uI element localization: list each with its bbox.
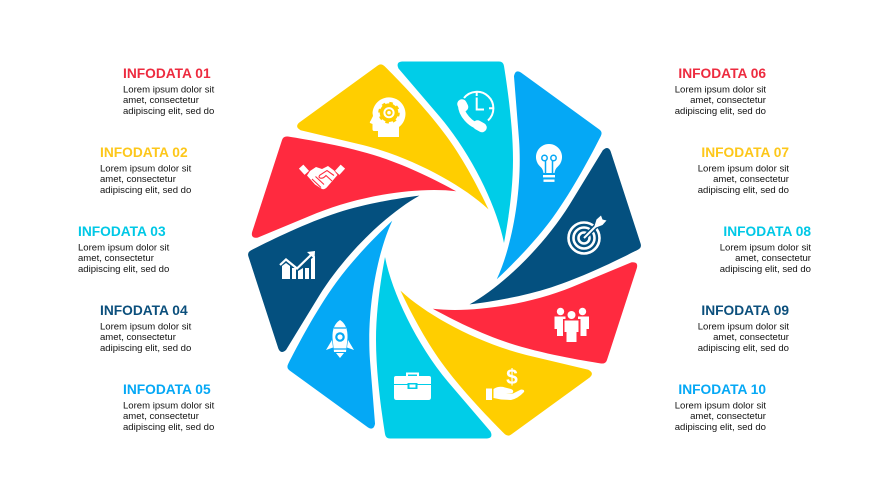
text: infodata 04: INFODATA 04 — [100, 303, 188, 318]
blade: red team — [430, 208, 638, 373]
text: infodata 07: Lorem ipsum dolor sit — [698, 164, 789, 174]
text: infodata 06: INFODATA 06 — [678, 66, 766, 81]
text: infodata 03 — [78, 224, 170, 275]
icon: head with gear — [370, 97, 405, 137]
icon: hand holding dollar — [486, 366, 524, 400]
wheel of ten blades — [244, 57, 645, 443]
text: infodata 07: adipiscing elit, sed do — [698, 185, 789, 196]
text: infodata 09: amet, consectetur — [713, 332, 790, 343]
text: infodata 05: adipiscing elit, sed do — [123, 422, 214, 433]
text: infodata 03: amet, consectetur — [78, 253, 155, 264]
text: infodata 05: Lorem ipsum dolor sit — [123, 400, 215, 412]
text: infodata 09: adipiscing elit, sed do — [698, 343, 789, 354]
text: infodata 01: Lorem ipsum dolor sit — [123, 84, 215, 96]
blade: navy chart — [244, 187, 452, 353]
text: infodata 05: INFODATA 05 — [123, 382, 211, 397]
text: infodata 01: INFODATA 01 — [123, 66, 211, 81]
text: infodata 08: INFODATA 08 — [723, 224, 811, 239]
text: infodata 05: amet, consectetur — [123, 411, 200, 422]
text: infodata 06: amet, consectetur — [690, 95, 767, 106]
icon: hand holding dollar: $ — [506, 366, 518, 389]
text: infodata 08: adipiscing elit, sed do — [720, 264, 811, 275]
text: infodata 08 — [720, 224, 812, 275]
text: infodata 03: Lorem ipsum dolor sit — [78, 242, 170, 254]
text: infodata 04 — [100, 303, 192, 354]
blade: navy target — [437, 147, 645, 313]
text: infodata 06 — [675, 66, 767, 117]
text: infodata 03: INFODATA 03 — [78, 224, 166, 239]
text: infodata 09 — [698, 303, 790, 354]
blade: cyan briefcase — [376, 257, 491, 438]
text: infodata 09: INFODATA 09 — [701, 303, 789, 318]
text: infodata 10: INFODATA 10 — [678, 382, 766, 397]
text: infodata 10: amet, consectetur — [690, 411, 767, 422]
text: infodata 02 — [100, 145, 192, 196]
text: infodata 04: amet, consectetur — [100, 332, 177, 343]
text: infodata 07 — [698, 145, 790, 196]
text: infodata 02: INFODATA 02 — [100, 145, 188, 160]
text: infodata 02: amet, consectetur — [100, 174, 177, 185]
text: infodata 02: Lorem ipsum dolor sit — [100, 164, 192, 174]
icon: briefcase — [394, 374, 431, 400]
text: infodata 09: Lorem ipsum dolor sit — [698, 322, 789, 332]
text: infodata 04: Lorem ipsum dolor sit — [100, 322, 192, 332]
blade: blue rocket — [278, 215, 478, 430]
text: infodata 02: adipiscing elit, sed do — [100, 185, 191, 196]
text: infodata 06: Lorem ipsum dolor sit — [675, 84, 766, 96]
text: infodata 04: adipiscing elit, sed do — [100, 343, 191, 354]
icon: rising bar chart — [280, 251, 315, 279]
text: infodata 01 — [123, 66, 215, 117]
text: infodata 08: amet, consectetur — [735, 253, 812, 264]
text: infodata 03: adipiscing elit, sed do — [78, 264, 169, 275]
blade: cyan top — [398, 62, 513, 243]
text: infodata 01: amet, consectetur — [123, 95, 200, 106]
text: infodata 10: adipiscing elit, sed do — [675, 422, 766, 433]
text: infodata 05 — [123, 382, 215, 433]
blade: blue bulb — [411, 70, 611, 285]
text: infodata 07: amet, consectetur — [713, 174, 790, 185]
icon: team of three — [554, 308, 589, 342]
text: infodata 10 — [675, 382, 767, 433]
text: infodata 06: adipiscing elit, sed do — [675, 106, 766, 117]
text: infodata 08: Lorem ipsum dolor sit — [720, 242, 811, 254]
icon: target with arrow — [568, 216, 606, 254]
text: infodata 01: adipiscing elit, sed do — [123, 106, 214, 117]
blade: yellow money — [393, 228, 593, 443]
icon: rocket — [326, 320, 354, 358]
icon: light bulb — [536, 144, 562, 182]
text: infodata 10: Lorem ipsum dolor sit — [675, 400, 766, 412]
icon: phone and clock — [461, 92, 493, 128]
text: infodata 07: INFODATA 07 — [701, 145, 789, 160]
blade: red handshake — [251, 127, 459, 292]
blade: yellow head — [296, 57, 496, 272]
icon: handshake — [299, 165, 345, 189]
